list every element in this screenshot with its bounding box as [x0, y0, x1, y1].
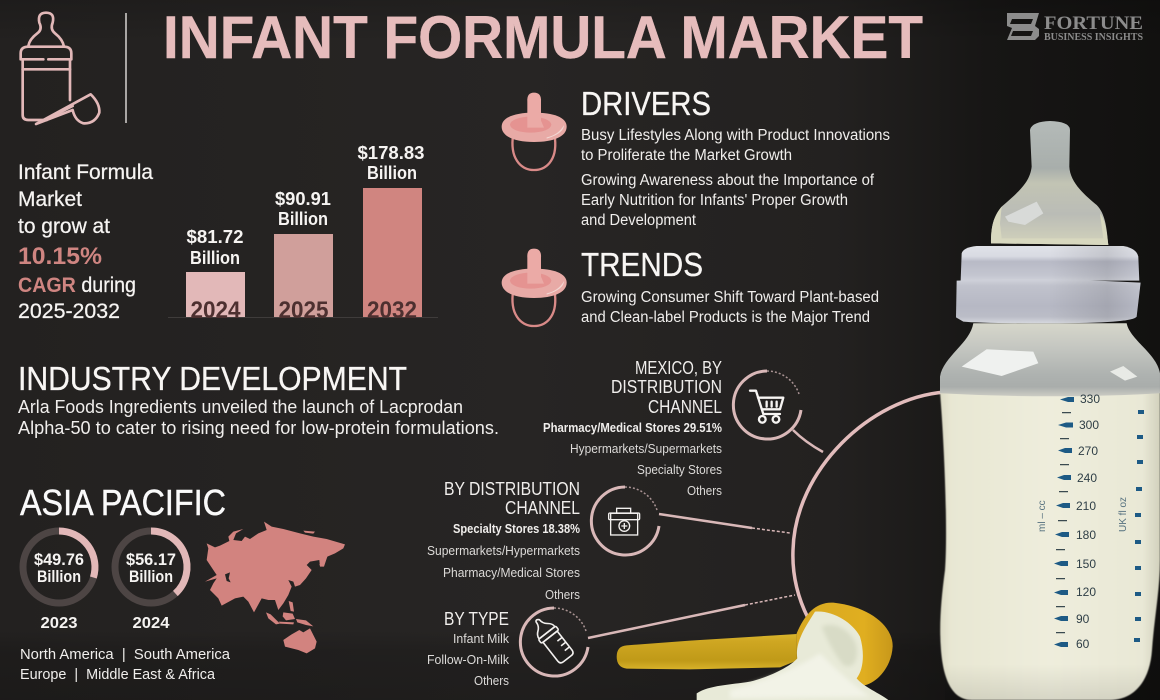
industry development text [18, 397, 499, 438]
donut 2023: $49.76 [34, 550, 84, 569]
CAGR text block: to grow at [18, 215, 110, 238]
mexico text: Hypermarkets/Supermarkets [570, 442, 722, 456]
donut 2024 [115, 531, 187, 632]
type text: Infant Milk [453, 632, 510, 646]
volume scale: 150 [1076, 557, 1096, 571]
donut 2023 [23, 531, 95, 632]
type text: Others [474, 674, 509, 688]
volume scale: ml – cc [1037, 500, 1048, 532]
CAGR text block: Infant Formula [18, 161, 153, 184]
bar chart: $90.91 [275, 189, 331, 209]
map: asia pacific [205, 522, 345, 653]
logo: BUSINESS INSIGHTS [1044, 32, 1143, 43]
volume scale: 210 [1076, 499, 1096, 513]
asia pacific heading: ASIA PACIFIC [20, 482, 226, 523]
trends text [581, 289, 879, 326]
title: INFANT FORMULA MARKET [163, 4, 923, 71]
large arc connecting to bottle [793, 392, 945, 618]
icon: cart in ring [733, 371, 801, 439]
donut 2023: Billion [37, 567, 81, 586]
drivers text: and Development [581, 212, 697, 229]
other regions text: North America | South America [20, 646, 231, 663]
mexico text [543, 358, 722, 498]
bar chart: Billion [367, 163, 417, 183]
volume scale: 90 [1076, 612, 1090, 626]
drivers text: Growing Awareness about the Importance of [581, 172, 875, 189]
icon: bottle and scoop outline [21, 13, 99, 124]
icon: pacifier trends [502, 249, 567, 326]
distribution channel text: BY DISTRIBUTION [444, 479, 580, 499]
industry development text: Alpha-50 to cater to rising need for low-protein formulations. [18, 418, 499, 438]
volume scale: 120 [1076, 585, 1096, 599]
type text: BY TYPE [444, 609, 509, 629]
drivers text: Early Nutrition for Infants' Proper Growth [581, 192, 848, 209]
distribution channel text: Others [545, 588, 580, 602]
logo [1007, 13, 1143, 43]
bar chart: 2025 [278, 297, 328, 324]
volume scale: 240 [1077, 471, 1097, 485]
industry development heading: INDUSTRY DEVELOPMENT [18, 360, 407, 397]
bar chart: $178.83 [358, 143, 424, 163]
CAGR text block: 2025-2032 [18, 300, 120, 323]
donut 2024: 2024 [132, 615, 170, 632]
CAGR text block: 10.15% [18, 243, 102, 270]
CAGR text block: CAGR during [18, 274, 136, 297]
divider [125, 13, 127, 123]
distribution channel text [427, 479, 580, 602]
distribution channel text: CHANNEL [505, 498, 580, 518]
mexico text: MEXICO, BY [635, 358, 722, 378]
other regions text [20, 646, 231, 683]
donut 2024: $56.17 [126, 550, 176, 569]
connector: mexico [793, 430, 823, 452]
drivers text [581, 127, 890, 229]
connector: type [588, 595, 795, 638]
other regions text: Europe | Middle East & Africa [20, 666, 216, 683]
drivers text: Busy Lifestyles Along with Product Innovations [581, 127, 890, 144]
volume scale [1037, 392, 1144, 651]
mexico text: CHANNEL [648, 397, 722, 417]
scoop with powder [617, 603, 893, 700]
mexico text: Specialty Stores [637, 463, 722, 477]
volume scale: 330 [1080, 392, 1100, 406]
CAGR text block [18, 161, 153, 323]
industry development text: Arla Foods Ingredients unveiled the launch of Lacprodan [18, 397, 463, 417]
drivers heading: DRIVERS [581, 85, 711, 122]
volume scale: 60 [1076, 637, 1090, 651]
logo: FORTUNE [1044, 13, 1143, 34]
distribution channel text: Supermarkets/Hypermarkets [427, 544, 580, 558]
trends text: Growing Consumer Shift Toward Plant-based [581, 289, 879, 306]
bar chart: 2032 [367, 297, 417, 324]
volume scale: 180 [1076, 528, 1096, 542]
distribution channel text: Pharmacy/Medical Stores [443, 566, 580, 580]
mexico text: DISTRIBUTION [611, 377, 722, 397]
trends text: and Clean-label Products is the Major Trend [581, 309, 870, 326]
icon: pacifier drivers [502, 93, 567, 170]
connector: distribution channel [659, 514, 790, 533]
CAGR text block: Market [18, 188, 82, 211]
bar chart: Billion [190, 248, 240, 268]
icon: medical kit in ring [591, 487, 659, 555]
top section of bottle [940, 121, 1160, 396]
distribution channel text: Specialty Stores 18.38% [453, 522, 580, 536]
milk body [940, 392, 1160, 700]
volume scale: UK fl oz [1118, 497, 1129, 532]
volume scale: 300 [1079, 418, 1099, 432]
donut 2024: Billion [129, 567, 173, 586]
mexico text: Pharmacy/Medical Stores 29.51% [543, 421, 722, 435]
donut 2023: 2023 [40, 615, 78, 632]
bar chart: 2024 [190, 297, 241, 324]
bar chart: Billion [278, 209, 328, 229]
type text [427, 609, 510, 688]
volume scale: 270 [1078, 444, 1098, 458]
drivers text: to Proliferate the Market Growth [581, 147, 792, 164]
type text: Follow-On-Milk [427, 653, 510, 667]
trends heading: TRENDS [581, 246, 703, 283]
bar chart [168, 143, 438, 324]
icon: bottle in ring [520, 608, 588, 676]
bar chart: $81.72 [186, 227, 244, 247]
mexico text: Others [687, 484, 722, 498]
baby bottle photo [940, 121, 1160, 700]
